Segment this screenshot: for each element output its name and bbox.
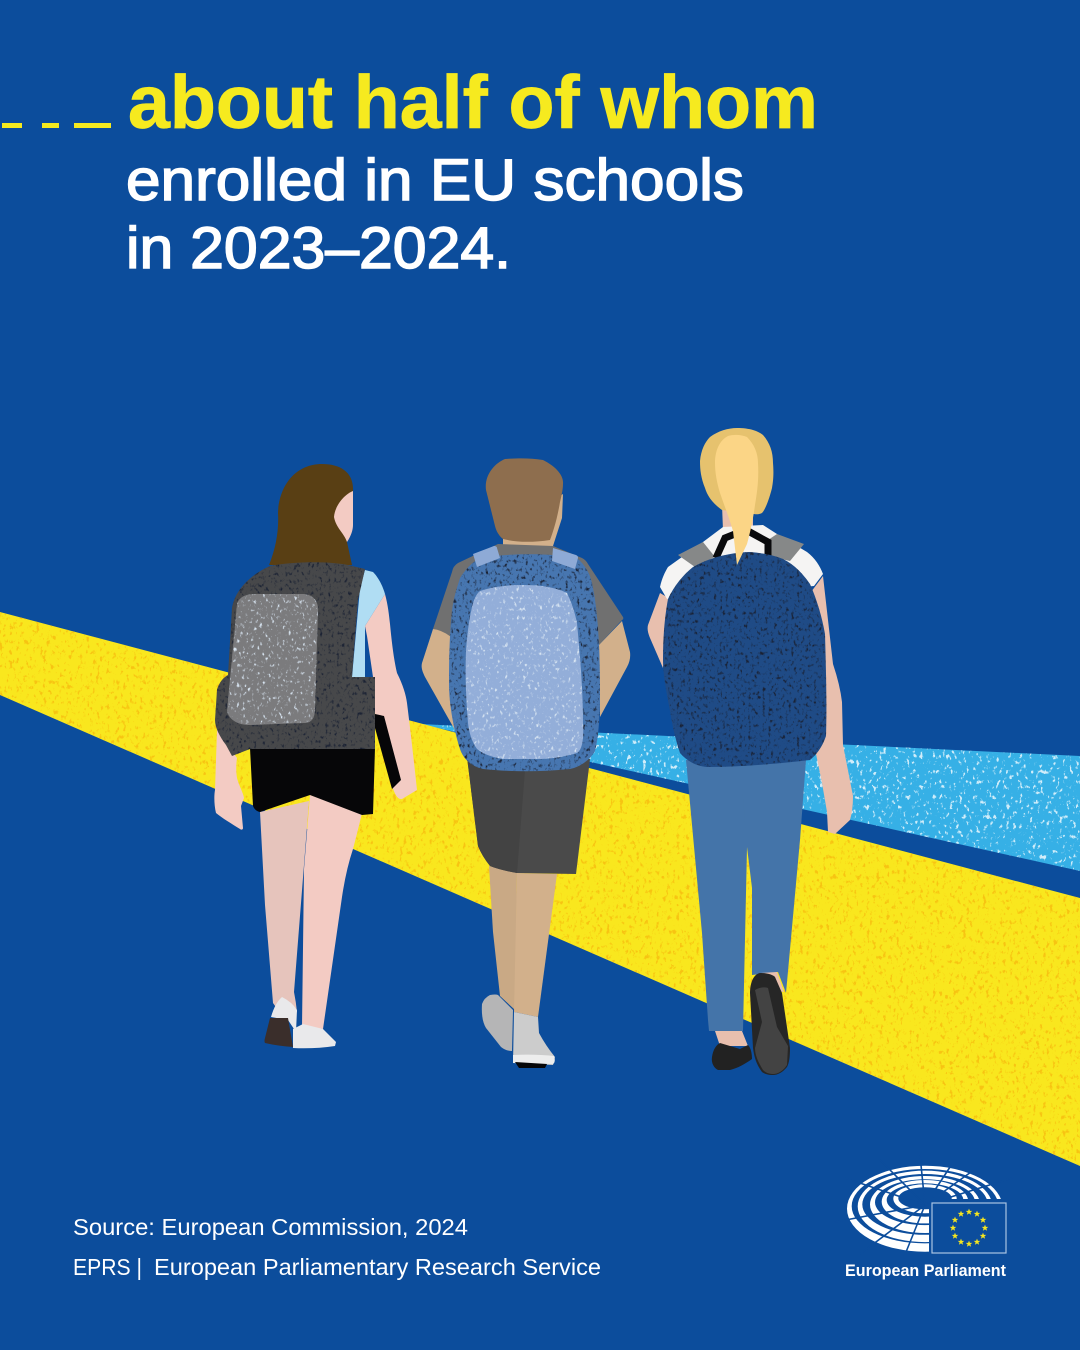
arms bbox=[422, 629, 456, 732]
hemicycle cut-out behind flag bbox=[929, 1199, 1011, 1261]
neck bbox=[722, 505, 753, 530]
white shirt bbox=[660, 525, 823, 599]
hair outer bbox=[700, 428, 773, 514]
shorts bbox=[250, 748, 375, 815]
ponytail bbox=[715, 435, 758, 565]
ankle and foot bbox=[715, 1031, 748, 1046]
neck and ear bbox=[503, 494, 563, 546]
backpack pocket bbox=[466, 585, 583, 759]
title dashes bbox=[2, 123, 111, 128]
student: boy with blue backpack bbox=[422, 458, 630, 1068]
right arm bbox=[805, 576, 853, 834]
backpack bbox=[663, 552, 826, 767]
face bbox=[334, 491, 353, 542]
right arm bbox=[365, 594, 417, 799]
legs bbox=[489, 866, 517, 1010]
logo wordmark: European Parliament bbox=[845, 1262, 1006, 1280]
jeans right leg bbox=[740, 760, 806, 993]
book bbox=[375, 714, 401, 789]
t-shirt bbox=[433, 544, 623, 645]
source text bbox=[73, 1214, 601, 1280]
t-shirt bbox=[352, 570, 385, 677]
left arm bbox=[648, 593, 672, 668]
backpack straps bbox=[473, 546, 500, 567]
student: girl with grey backpack bbox=[214, 464, 417, 1048]
yellow road band bbox=[0, 612, 1080, 1166]
front leg bbox=[302, 795, 362, 1029]
shorts bbox=[467, 757, 590, 874]
hair bbox=[486, 458, 563, 542]
title: about half of whom bbox=[128, 60, 818, 144]
shoes bbox=[271, 997, 297, 1032]
European Parliament logo bbox=[835, 1155, 1012, 1280]
left arm bbox=[214, 730, 244, 830]
hemicycle rings bbox=[847, 1166, 1003, 1252]
hair bbox=[269, 464, 353, 565]
hemicycle radial gaps bbox=[835, 1155, 1012, 1262]
shoes bbox=[712, 1043, 752, 1070]
EU stars bbox=[950, 1209, 988, 1247]
source text: European Parliamentary Research Service bbox=[154, 1254, 601, 1280]
grey straps bbox=[678, 542, 715, 567]
EU flag bbox=[932, 1203, 1006, 1253]
title: in 2023–2024. bbox=[126, 216, 511, 281]
backpack bbox=[215, 562, 375, 756]
backpack pocket bbox=[227, 594, 318, 725]
black harness bbox=[716, 531, 768, 558]
jeans left leg bbox=[686, 760, 760, 1031]
backpack bbox=[449, 554, 600, 771]
shoes bbox=[482, 994, 513, 1051]
student: blonde girl with navy backpack bbox=[648, 428, 853, 1075]
source text: EPRS | bbox=[73, 1254, 142, 1280]
title bbox=[126, 60, 818, 281]
title: enrolled in EU schools bbox=[126, 148, 744, 213]
light blue road band bbox=[420, 724, 1080, 871]
back leg bbox=[260, 801, 309, 1020]
source text: Source: European Commission, 2024 bbox=[73, 1214, 468, 1240]
